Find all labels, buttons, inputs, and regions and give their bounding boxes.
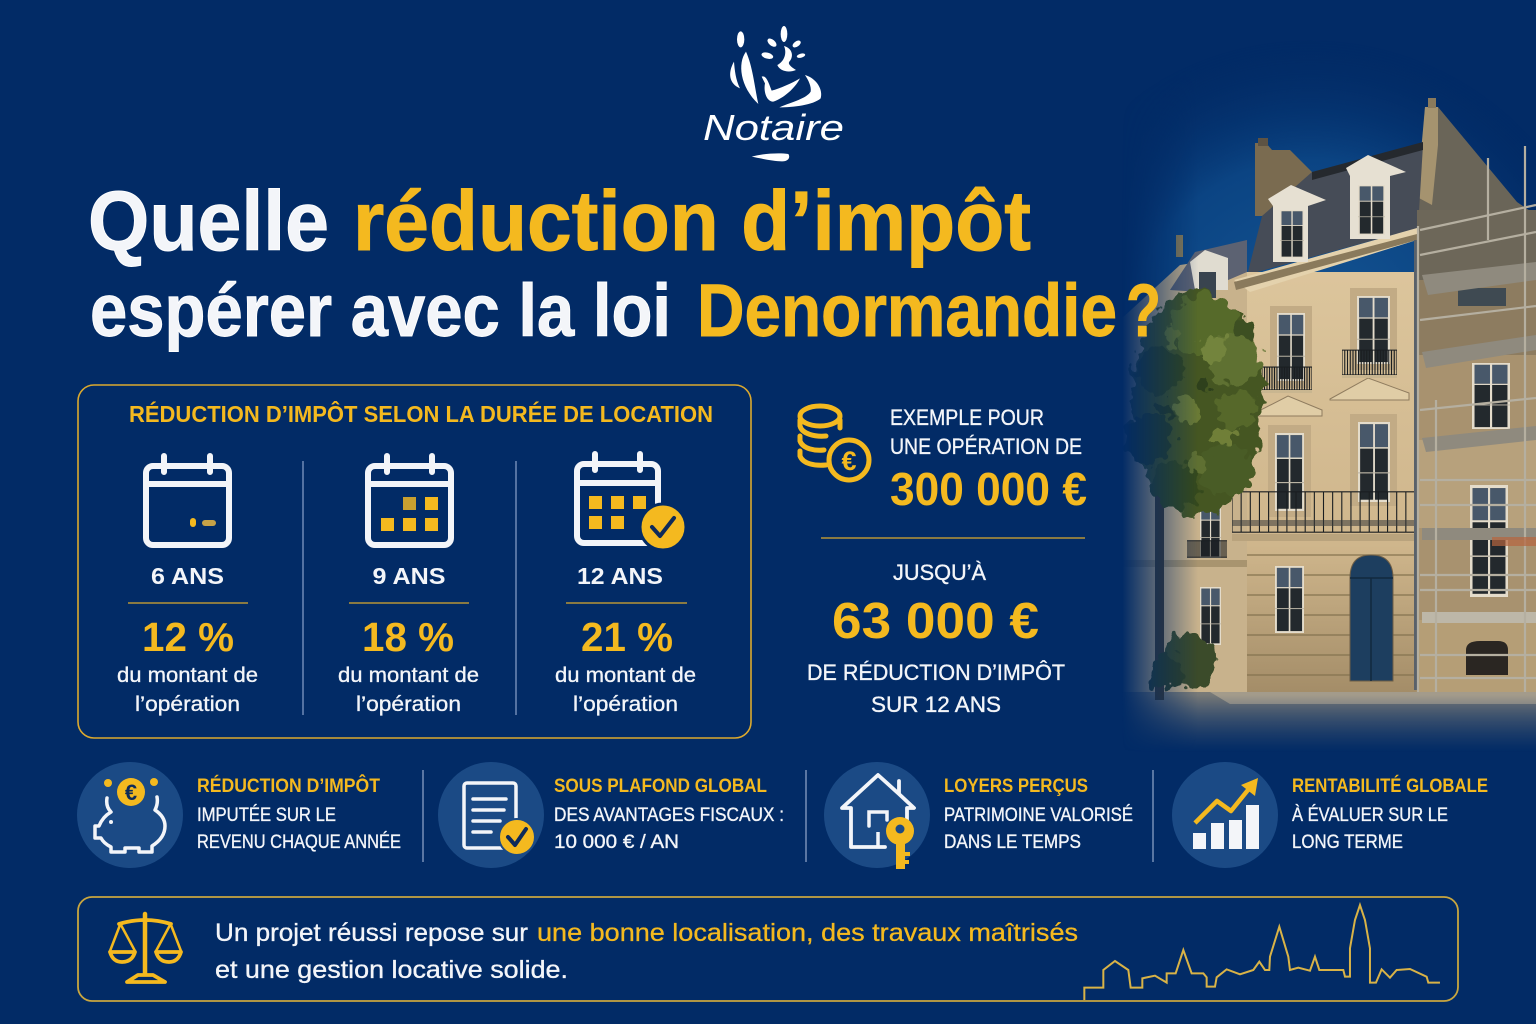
scaffolding — [1422, 262, 1536, 623]
text: 10 000 € / AN — [554, 831, 679, 853]
tree — [1126, 290, 1263, 514]
maximum reduction: 63 000 € — [832, 592, 1039, 649]
title: Denormandie — [697, 269, 1117, 352]
percentage: 12 % — [142, 614, 234, 660]
caption: du montant de — [555, 663, 696, 687]
column: 9 years: l’opération — [356, 692, 461, 716]
up to: JUSQU’À — [893, 560, 986, 585]
door — [1350, 555, 1393, 681]
panel: example calculation: UNE OPÉRATION DE — [890, 434, 1082, 459]
conclusion text: Un projet réussi repose sur — [215, 919, 528, 947]
example amount: 300 000 € — [890, 463, 1087, 515]
icon: rising chart — [1193, 778, 1259, 849]
percentage: 21 % — [581, 614, 673, 660]
example text: EXEMPLE POUR — [890, 405, 1044, 430]
text — [944, 775, 1133, 853]
icon: piggy bank: € — [125, 780, 137, 805]
logo: Notaire: Notaire — [703, 107, 844, 148]
conclusion text: et une gestion locative solide. — [215, 956, 568, 984]
logo: Notaire — [703, 26, 844, 161]
road — [1128, 692, 1536, 744]
panel: example calculation: SUR 12 ANS — [871, 692, 1001, 717]
text — [1292, 774, 1488, 853]
duration: 9 ANS — [372, 563, 446, 589]
text: DES AVANTAGES FISCAUX : — [554, 804, 784, 826]
facade — [1247, 272, 1418, 692]
panel: example calculation — [800, 405, 1087, 717]
text: DANS LE TEMPS — [944, 831, 1081, 853]
text: IMPUTÉE SUR LE — [197, 803, 336, 826]
icon: calendar 6 — [146, 456, 229, 545]
panel: reduction by rental duration — [78, 385, 751, 738]
percentage: 18 % — [362, 614, 454, 660]
text: À ÉVALUER SUR LE — [1292, 803, 1448, 826]
benefit: global ceiling — [438, 762, 784, 868]
icon: scales of justice — [110, 914, 181, 982]
text: RÉDUCTION D’IMPÔT — [197, 773, 380, 797]
window surrounds — [1270, 306, 1312, 388]
text: REVENU CHAQUE ANNÉE — [197, 830, 401, 853]
pediments — [1253, 396, 1322, 416]
text: PATRIMOINE VALORISÉ — [944, 803, 1133, 826]
scaffold wall — [1419, 355, 1536, 620]
panel: conclusion — [78, 897, 1458, 1001]
skyline outline — [1084, 905, 1440, 1000]
photo: renovated Haussmann building with scaffolding — [1126, 98, 1536, 744]
windows — [1277, 313, 1305, 381]
panel heading: RÉDUCTION D’IMPÔT SELON LA DURÉE DE LOCATION — [129, 400, 713, 427]
text — [554, 775, 784, 853]
column: 6 years: l’opération — [135, 692, 240, 716]
column: 9 years — [338, 456, 479, 716]
duration: 12 ANS — [577, 563, 663, 589]
dormers — [1268, 185, 1326, 262]
column: 6 years — [117, 456, 258, 716]
conclusion text — [215, 919, 1078, 984]
benefit: overall return — [1172, 762, 1488, 868]
title: espérer avec la loi — [90, 269, 671, 352]
text: LONG TERME — [1292, 831, 1403, 853]
icon: house with key — [842, 775, 914, 869]
column: 12 years: l’opération — [573, 692, 678, 716]
benefit: tax reduction — [77, 762, 401, 868]
row: key benefits — [77, 762, 1488, 869]
benefit: rental income — [824, 762, 1133, 869]
side wall and chimney — [1419, 107, 1528, 210]
balconies — [1262, 367, 1312, 390]
icon: document with check — [464, 783, 535, 855]
icon: calendar 9 — [368, 456, 451, 545]
title: réduction d’impôt — [353, 174, 1031, 268]
caption: du montant de — [117, 663, 258, 687]
slate roof — [1248, 145, 1423, 274]
conclusion text: une bonne localisation, des travaux maîtrisés — [537, 919, 1078, 947]
icon: calendar 12 — [577, 454, 686, 550]
shrub — [1147, 632, 1216, 690]
text: LOYERS PERÇUS — [944, 775, 1088, 797]
ground floor stone courses — [1247, 555, 1418, 675]
title — [88, 174, 1161, 352]
tree trunk — [1155, 490, 1164, 700]
duration: 6 ANS — [151, 563, 224, 589]
icon: coins: € — [841, 446, 857, 476]
text: SOUS PLAFOND GLOBAL — [554, 775, 767, 797]
text — [197, 773, 401, 853]
text: RENTABILITÉ GLOBALE — [1292, 774, 1488, 797]
column: 12 years — [555, 454, 696, 716]
neighbour building — [1120, 255, 1247, 692]
icon: coins — [800, 406, 869, 480]
title: Quelle — [88, 174, 329, 268]
title: ? — [1126, 269, 1161, 352]
caption: du montant de — [338, 663, 479, 687]
downpipe — [1414, 240, 1417, 690]
maximum reduction caption: DE RÉDUCTION D’IMPÔT — [807, 660, 1065, 685]
icon: piggy bank — [95, 778, 165, 852]
